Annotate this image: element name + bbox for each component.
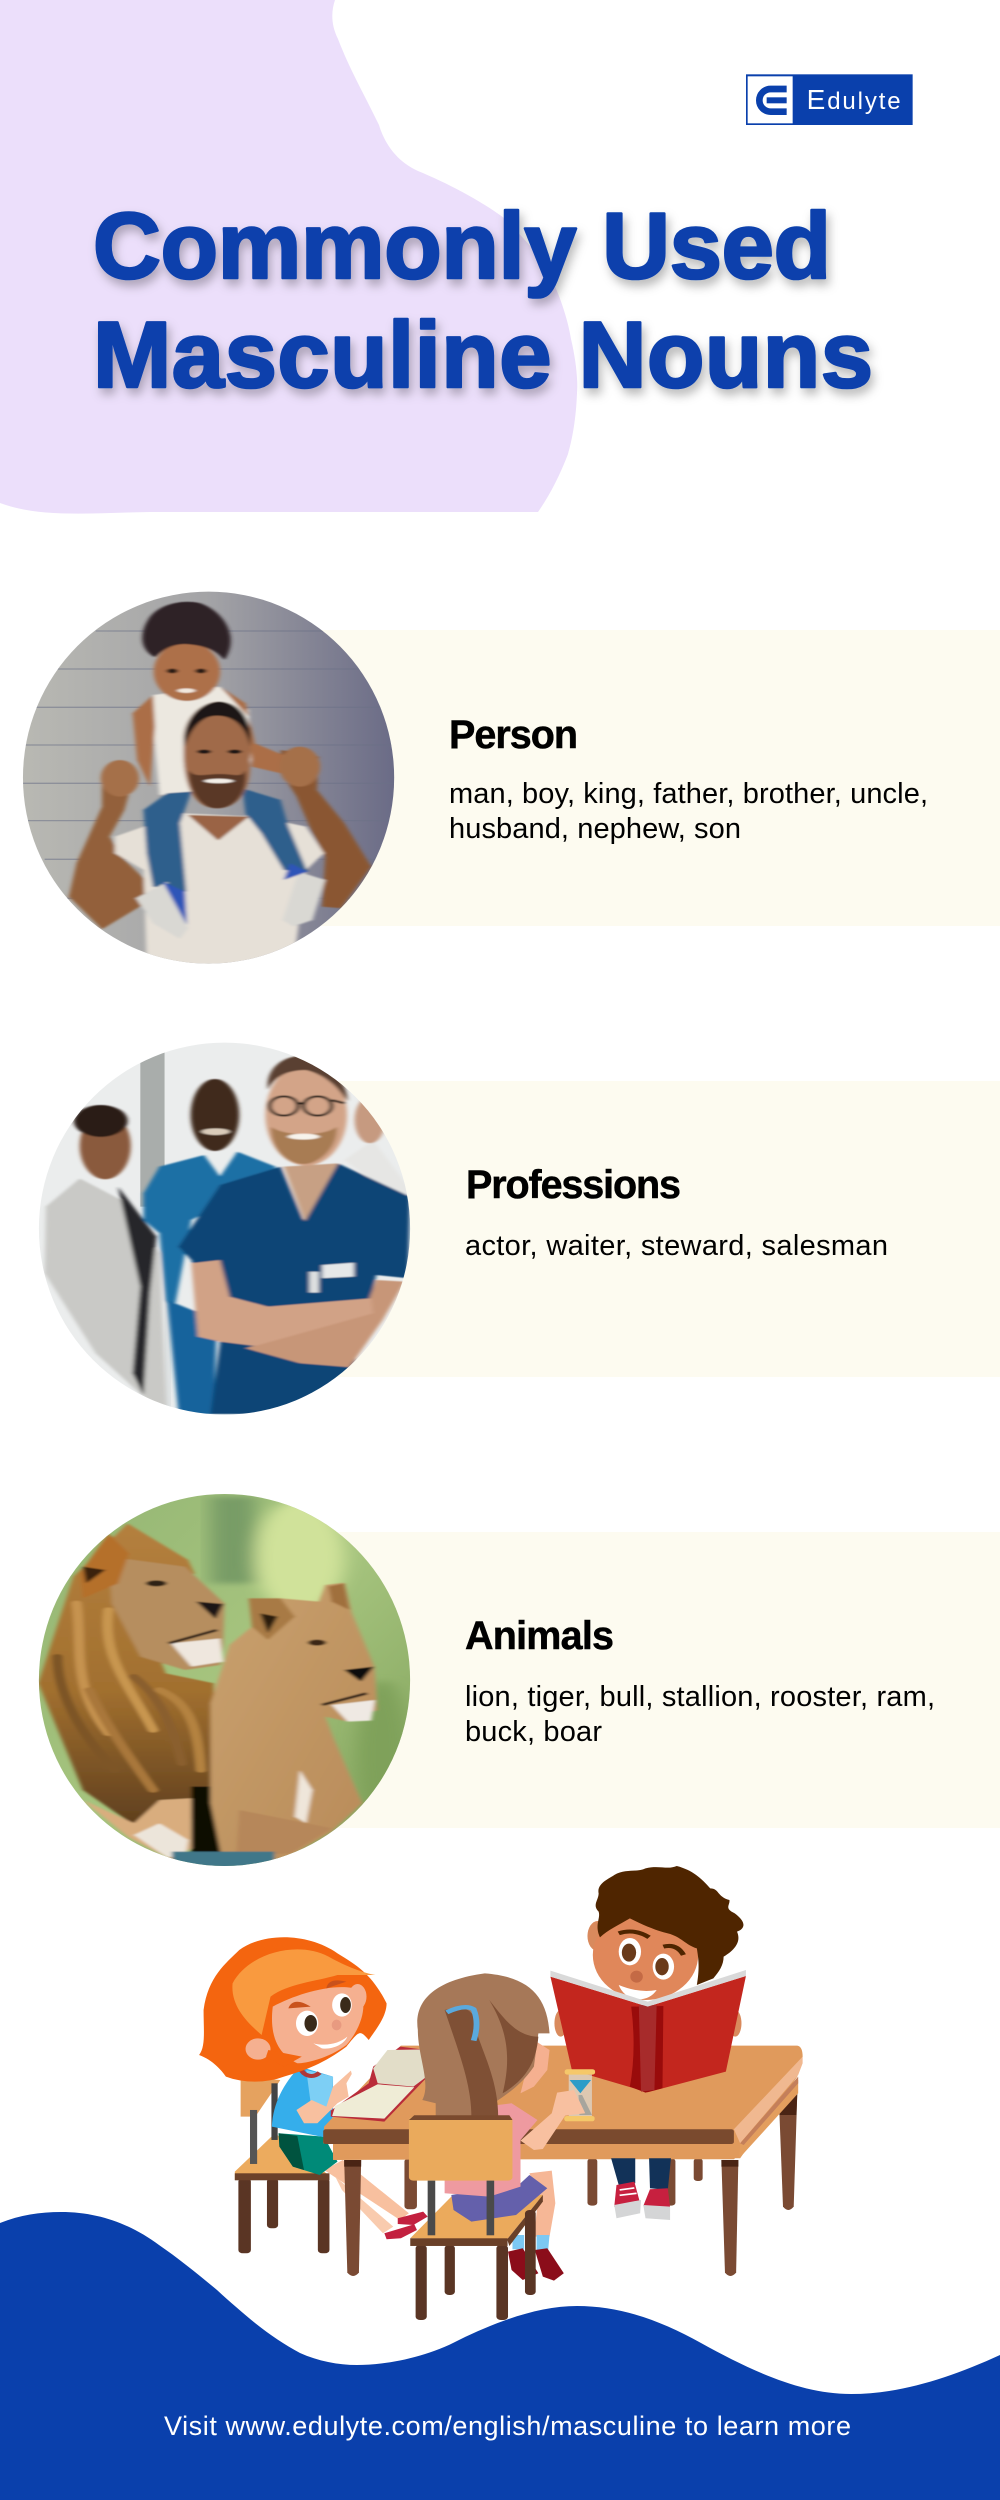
heading: animals: Animals	[465, 1614, 614, 1658]
girl: brown ponytail and chair	[409, 1973, 585, 2320]
photo: medical staff	[35, 1040, 418, 1420]
logo: Edulyte	[746, 74, 913, 125]
text: person examples	[449, 778, 928, 845]
background blob: lilac	[0, 0, 577, 514]
heading: professions: Professions	[466, 1163, 681, 1207]
text: profession examples: actor, waiter, steward, salesman	[465, 1230, 888, 1262]
footer call to action: Visit www.edulyte.com/english/masculine to learn more	[164, 2411, 851, 2441]
photo: lion and lioness	[35, 1490, 418, 1870]
heading: person: Person	[449, 713, 578, 757]
text: person examples: man, boy, king, father, brother, uncle,	[449, 778, 928, 810]
title	[93, 193, 873, 407]
panel: professions	[35, 1040, 1000, 1420]
desk	[323, 2046, 803, 2276]
girl: orange hair	[199, 1937, 428, 2239]
text: person examples: husband, nephew, son	[449, 813, 741, 845]
text: animal examples: lion, tiger, bull, stallion, rooster, ram,	[465, 1681, 935, 1713]
panel: animals	[35, 1490, 1000, 1870]
title: Masculine Nouns	[93, 302, 873, 407]
open book on desk	[331, 2047, 428, 2122]
chair: left	[235, 2077, 329, 2253]
hourglass	[564, 2069, 595, 2121]
logo: Edulyte: Edulyte	[807, 84, 901, 115]
footer wave	[0, 2212, 1000, 2500]
illustration: children at desk	[199, 1866, 803, 2320]
title: Commonly Used	[93, 193, 831, 298]
panel: person	[19, 590, 1000, 967]
text: animal examples	[465, 1681, 935, 1748]
boy with red book	[550, 1866, 746, 2220]
text: animal examples: buck, boar	[465, 1716, 602, 1748]
photo: father and son	[19, 590, 402, 967]
